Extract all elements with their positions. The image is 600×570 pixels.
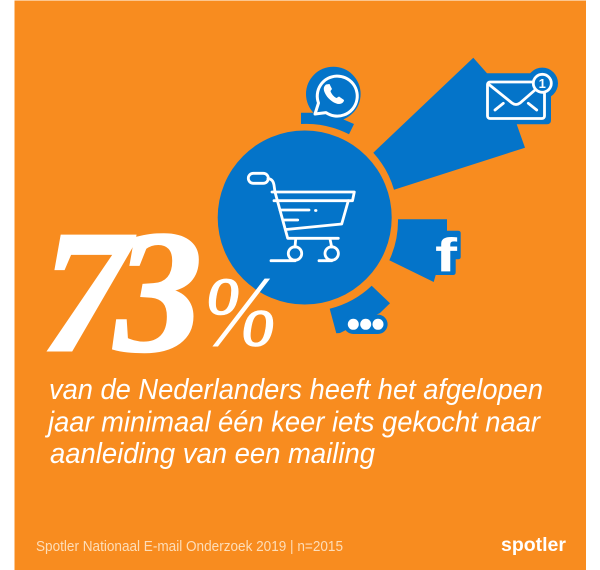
main statement: jaar minimaal één keer iets gekocht naar [44,406,541,438]
logo: spotler: spotler [501,535,567,556]
facebook f: f [435,228,457,282]
central circle [218,130,392,304]
icon: shopping cart [248,173,354,261]
big number 73%: 7 [42,195,135,388]
notification number: 1 [539,76,546,91]
sector: whatsapp [301,67,361,134]
sector: facebook [389,219,461,282]
big number 73%: % [204,256,278,367]
main statement: van de Nederlanders heeft het afgelopen [49,374,543,406]
source footnote: Spotler Nationaal E-mail Onderzoek 2019 | n=2015 [36,539,343,555]
sector: chat bubble [330,286,390,334]
main statement: aanleiding van een mailing [50,438,375,470]
sector: email [373,58,558,190]
big number 73% [42,195,278,388]
main statement [44,374,543,470]
big number 73%: 3 [113,195,202,388]
graphic: channels around shopping cart [218,58,558,334]
